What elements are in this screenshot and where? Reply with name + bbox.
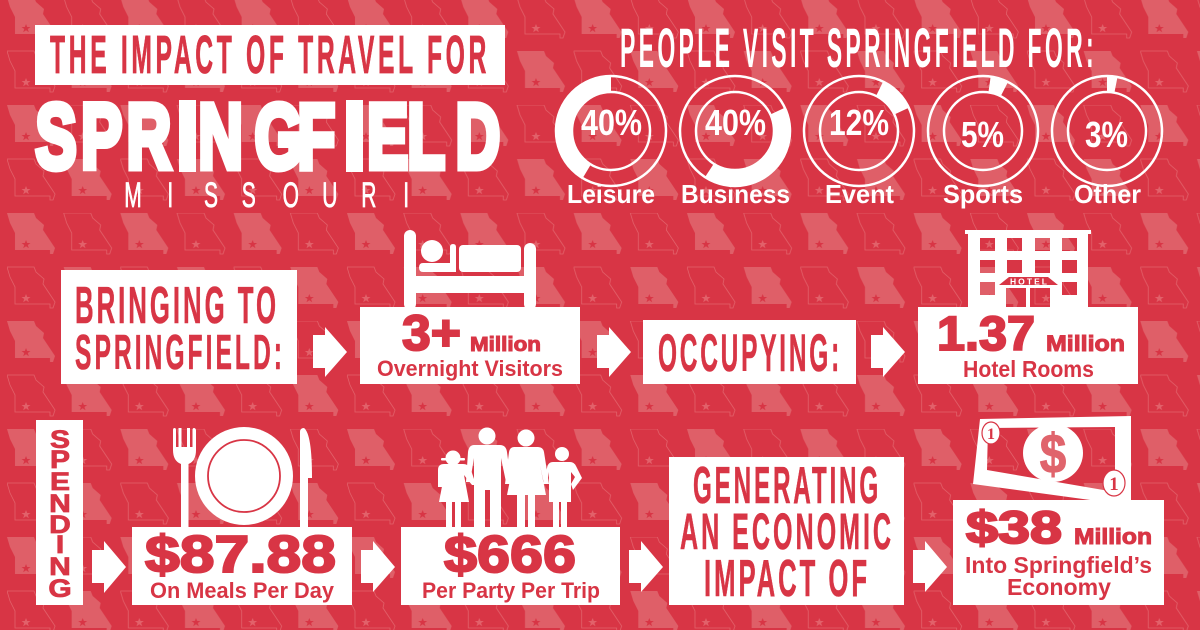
donut: leisure 40%: Leisure <box>567 179 655 209</box>
panel: overnight visitors <box>360 230 580 384</box>
donut: sports 5%: 5% <box>961 114 1004 155</box>
icon: dollar bill <box>973 416 1131 502</box>
donut: leisure 40%: 40% <box>581 102 642 143</box>
stat box: 3+ million overnight visitors <box>360 305 580 384</box>
stat box: $666 per party per trip: Per Party Per Trip <box>422 578 600 603</box>
arrow <box>92 541 126 593</box>
stat box: 1.37 million hotel rooms: Hotel Rooms <box>963 356 1094 382</box>
stat box: 1.37 million hotel rooms: Million <box>1046 331 1125 356</box>
stat box: $87.88 on meals per day <box>132 526 352 605</box>
donut: sports 5%: Sports <box>943 179 1023 209</box>
icon: dollar bill: $ <box>1040 423 1066 486</box>
donut: event 12%: Event <box>825 179 894 209</box>
donut: event 12%: 12% <box>829 102 889 143</box>
stat box: 3+ million overnight visitors: Overnight Visitors <box>377 356 563 381</box>
arrow <box>597 327 631 377</box>
panel: occupying <box>643 320 856 384</box>
panel: generating an economic impact of: GENERATING <box>693 457 881 515</box>
arrow <box>361 541 395 592</box>
stat box: $38 million into Springfield's economy: Economy <box>1007 574 1111 600</box>
donut: other 3%: Other <box>1074 179 1141 209</box>
icon: hotel: HOTEL <box>1010 276 1047 286</box>
panel: people visit Springfield for <box>556 16 1162 209</box>
heading: Missouri: MISSOURI <box>124 177 409 215</box>
icon: dollar bill: 1 <box>1109 474 1119 495</box>
icon: fork, plate and knife <box>173 427 312 527</box>
panel: generating an economic impact of <box>669 457 904 608</box>
icon: bed <box>404 230 536 310</box>
stat box: $38 million into Springfield's economy: Into Springfield’s <box>965 552 1152 578</box>
donut: business 40%: Business <box>681 179 790 209</box>
stat box: $87.88 on meals per day: $87.88 <box>145 526 336 584</box>
donut: business 40% <box>680 76 790 209</box>
panel: per party per trip <box>401 428 620 605</box>
donut: event 12% <box>804 76 914 209</box>
text: THE IMPACT OF TRAVEL FOR <box>50 25 490 85</box>
donut: other 3%: 3% <box>1085 114 1128 155</box>
stat box: 3+ million overnight visitors: 3+ <box>402 305 461 361</box>
donut: sports 5% <box>928 76 1038 209</box>
arrow <box>871 327 905 377</box>
icon: dollar bill: 1 <box>987 426 995 443</box>
arrow <box>629 541 663 592</box>
icon: family <box>438 428 582 527</box>
stat box: $38 million into Springfield's economy: $38 <box>966 502 1062 553</box>
panel: meals per day <box>132 427 352 605</box>
title block <box>35 25 505 215</box>
panel: generating an economic impact of: IMPACT OF <box>704 550 870 608</box>
stat box: $666 per party per trip: $666 <box>444 526 576 584</box>
text: OCCUPYING: <box>658 324 842 383</box>
donut: business 40%: 40% <box>705 102 766 143</box>
stat box: $666 per party per trip <box>401 526 620 605</box>
panel: bringing to Springfield: SPRINGFIELD: <box>75 326 285 380</box>
arrow <box>913 541 947 592</box>
stat box: 1.37 million hotel rooms: 1.37 <box>937 308 1035 361</box>
stat box: $38 million into Springfield's economy <box>953 500 1164 605</box>
panel: spending label <box>36 420 83 605</box>
panel: bringing to Springfield <box>61 270 297 384</box>
arrow <box>313 327 347 377</box>
stat box: 1.37 million hotel rooms <box>918 307 1138 384</box>
panel: hotel rooms <box>918 230 1138 384</box>
heading: the impact of travel for <box>35 25 505 85</box>
panel: spending label: SPENDING <box>48 425 72 602</box>
icon: hotel <box>965 230 1091 310</box>
heading: Springfield: SPRINGFIELD <box>36 85 500 188</box>
donut: other 3% <box>1052 76 1162 209</box>
panel: bringing to Springfield: BRINGING TO <box>75 277 279 335</box>
donut: leisure 40% <box>556 76 666 209</box>
stat box: 3+ million overnight visitors: Million <box>470 334 541 356</box>
stat box: $87.88 on meals per day: On Meals Per Day <box>150 578 334 603</box>
stat box: $38 million into Springfield's economy: Million <box>1074 524 1152 549</box>
panel: generating an economic impact of: AN ECONOMIC <box>680 503 894 560</box>
panel: economic impact <box>953 416 1164 605</box>
